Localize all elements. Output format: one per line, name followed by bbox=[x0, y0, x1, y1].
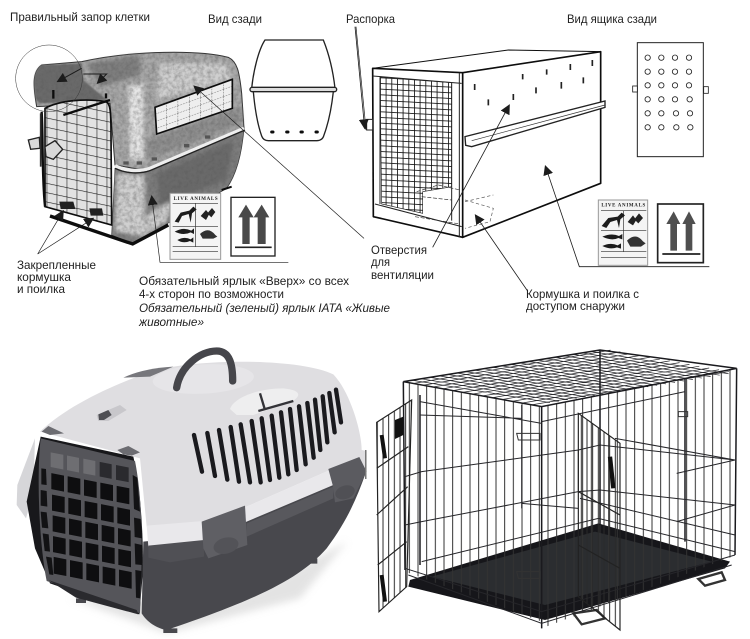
arrow: feed cup 1 bbox=[38, 211, 63, 254]
door hinge pads bbox=[395, 417, 403, 439]
left rim bbox=[17, 438, 35, 518]
caption: outside feeder bbox=[526, 288, 639, 313]
base line bbox=[50, 216, 168, 244]
crate body bbox=[373, 50, 601, 237]
label: live animals: LIVE ANIMALS bbox=[601, 204, 646, 209]
horizontal wires bbox=[405, 392, 735, 623]
caption: ventilation holes bbox=[371, 244, 434, 282]
belt edge bbox=[115, 130, 245, 173]
arrow: labels bbox=[545, 166, 709, 267]
right side holes bbox=[133, 475, 142, 598]
vent top cover bbox=[230, 388, 298, 415]
kennel body upper shell bbox=[34, 52, 244, 171]
caption: ventilation holes: вентиляции bbox=[371, 269, 434, 282]
caption: up label required bbox=[139, 275, 349, 301]
left face wires bbox=[403, 382, 543, 625]
captions bbox=[10, 11, 657, 329]
latch T bbox=[258, 393, 293, 411]
feed cup front bbox=[415, 185, 460, 224]
top latch button bbox=[97, 405, 127, 421]
label: live animals: LIVE ANIMALS bbox=[174, 197, 218, 202]
diagram: plastic air-travel kennel bbox=[16, 27, 366, 262]
rim band bbox=[147, 470, 333, 547]
door hinge rod bbox=[38, 113, 43, 167]
caption: ventilation holes: Отверстия bbox=[371, 244, 427, 257]
caption: up label required: 4-х сторон по возможности bbox=[139, 288, 284, 301]
caption: IATA label required bbox=[138, 302, 391, 329]
belt bolts bbox=[123, 135, 210, 165]
floor tray bbox=[408, 523, 730, 620]
label: live animals bbox=[170, 193, 221, 259]
caption: ventilation holes: для bbox=[371, 256, 390, 269]
feed cup side dashes bbox=[465, 195, 493, 228]
door hinge tabs bbox=[42, 426, 140, 456]
door bbox=[27, 437, 143, 614]
mottled scan texture bbox=[30, 47, 250, 247]
rear view of kennel bbox=[250, 40, 337, 141]
belt line bbox=[115, 128, 244, 171]
arrow: to window bbox=[194, 86, 364, 238]
sliver at photo edge bbox=[365, 450, 366, 479]
upper shell bbox=[40, 362, 367, 527]
caption: fixed feeder: Закрепленные bbox=[17, 259, 96, 272]
caption: fixed feeder: кормушка bbox=[17, 271, 72, 284]
door outer bbox=[27, 437, 143, 614]
belt under bbox=[247, 487, 333, 537]
caption: spacer: Распорка bbox=[346, 13, 396, 26]
caption: up label required: Обязательный ярлык «Вверх» со всех bbox=[139, 275, 349, 288]
caption: correct latch: Правильный запор клетки bbox=[10, 11, 150, 24]
photo: wire dog crate bbox=[377, 350, 738, 632]
rear vent cap bbox=[123, 367, 173, 378]
inset circle bbox=[16, 45, 82, 112]
caption: fixed feeder bbox=[17, 259, 96, 296]
feed cups bbox=[59, 202, 103, 216]
clip rear bbox=[328, 457, 367, 502]
caption: outside feeder: Кормушка и поилка с bbox=[526, 288, 639, 301]
shell highlights bbox=[87, 55, 242, 160]
left side holes bbox=[41, 468, 53, 575]
label: this way up bbox=[231, 197, 275, 256]
right face wires bbox=[542, 368, 738, 632]
side slide bolts bbox=[517, 412, 688, 578]
handle recess bbox=[152, 362, 255, 396]
tray handles bbox=[573, 572, 725, 624]
door latch left bbox=[382, 435, 385, 602]
label: live animals bbox=[598, 200, 648, 265]
tray inner bbox=[432, 532, 712, 605]
foot bbox=[222, 187, 232, 190]
label: this way up bbox=[658, 204, 703, 263]
clip front bbox=[202, 506, 247, 558]
arrow: ventilation bbox=[433, 105, 509, 247]
caption: crate rear view: Вид ящика сзади bbox=[567, 13, 657, 26]
caption: fixed feeder: и поилка bbox=[17, 283, 66, 296]
top mesh bbox=[412, 350, 729, 405]
lower shell highlights bbox=[115, 140, 233, 238]
door frame bbox=[39, 438, 142, 613]
arrow: feed cup 2 bbox=[38, 218, 93, 254]
latch button dark bbox=[98, 410, 112, 420]
arrow: up label bbox=[152, 196, 288, 262]
door latch bbox=[28, 137, 63, 159]
arrow: spacer pointer bbox=[355, 27, 365, 128]
side vent slots bbox=[194, 390, 341, 482]
diagram: wooden shipping crate bbox=[355, 27, 709, 291]
mesh front bbox=[380, 77, 452, 213]
door holes bbox=[51, 452, 132, 589]
rim underside dark bbox=[148, 540, 204, 562]
photo: plastic pet carrier bbox=[17, 351, 367, 633]
floor shadow bbox=[70, 542, 347, 633]
front frame inner bbox=[373, 73, 462, 237]
handle bbox=[177, 351, 233, 388]
rear view of crate bbox=[633, 43, 708, 157]
caption: IATA label required: Обязательный (зеленый) ярлык IATA «Живые bbox=[139, 302, 391, 315]
arrow: spacer bbox=[356, 27, 366, 129]
arrows bbox=[355, 27, 709, 291]
spacer block bbox=[367, 119, 373, 130]
door latch center bbox=[610, 457, 613, 488]
cage frame bbox=[403, 350, 737, 628]
clip front recess bbox=[212, 535, 240, 556]
wire door bbox=[45, 100, 112, 225]
kennel lower shell bbox=[112, 128, 244, 244]
rail inner line bbox=[472, 105, 605, 141]
caption: outside feeder: доступом снаружи bbox=[526, 300, 625, 313]
caption: IATA label required: животные» bbox=[138, 316, 204, 329]
ventilation slots bbox=[475, 60, 592, 105]
clip rear recess bbox=[333, 483, 357, 502]
side window bbox=[155, 79, 232, 134]
arrow: latch 1 bbox=[57, 68, 82, 82]
left open door bbox=[377, 400, 412, 612]
door frame bars bbox=[42, 90, 110, 207]
arrow: latch 2 bbox=[83, 74, 107, 83]
dark latch zone on top bbox=[34, 63, 107, 103]
feet bbox=[76, 558, 317, 633]
rail bbox=[465, 101, 605, 147]
door bottom sill bbox=[48, 580, 138, 614]
lower shell bbox=[142, 475, 365, 630]
caption: rear view: Вид сзади bbox=[208, 13, 262, 26]
arrows on latch and pointers bbox=[38, 27, 366, 262]
center open door bbox=[578, 413, 620, 630]
arrow: feeder bbox=[475, 215, 527, 291]
